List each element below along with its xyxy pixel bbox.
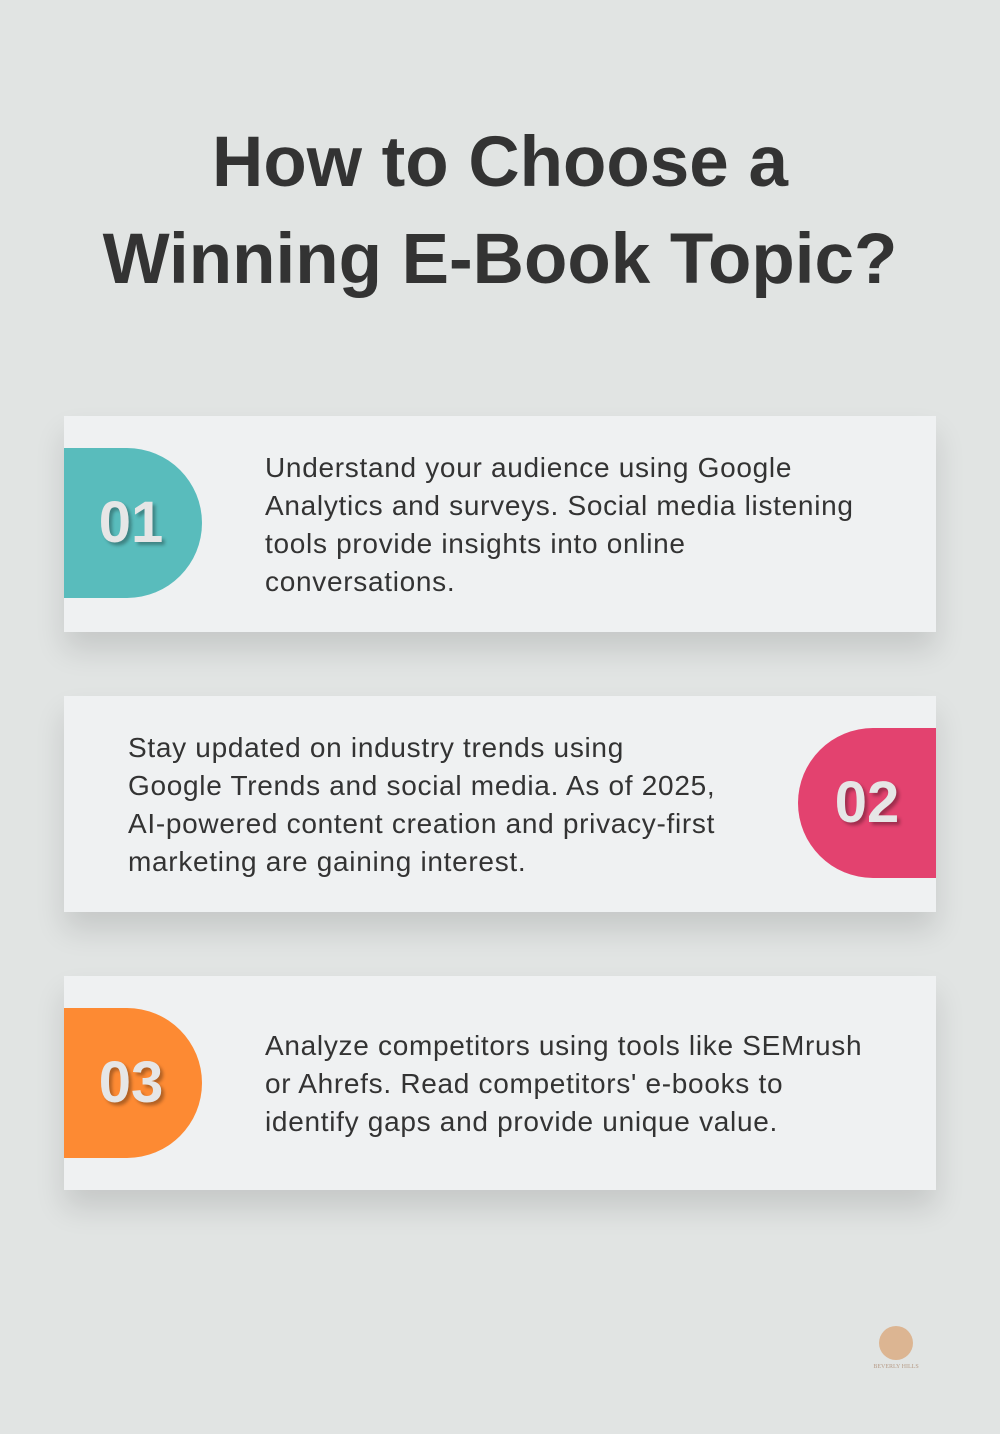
text 2: Stay updated on industry trends using (128, 732, 624, 763)
title: How to Choose a (212, 123, 788, 202)
text 1: tools provide insights into online (265, 528, 686, 559)
text 1: Understand your audience using Google (265, 452, 792, 483)
badge 03: 03 (99, 1050, 163, 1115)
text 3: or Ahrefs. Read competitors' e-books to (265, 1068, 783, 1099)
title (102, 123, 897, 299)
badge 01 (64, 448, 202, 598)
text 2: marketing are gaining interest. (128, 846, 526, 877)
badge 01: 01 (99, 490, 163, 555)
text 2: Google Trends and social media. As of 2025, (128, 770, 715, 801)
logo (873, 1326, 919, 1370)
title: Winning E-Book Topic? (103, 220, 897, 299)
logo: BEVERLY HILLS (873, 1364, 919, 1370)
panel: step 2 (64, 696, 936, 912)
text 2 (128, 732, 715, 877)
text 3 (265, 1030, 862, 1137)
text 1 (265, 452, 854, 597)
text 3: Analyze competitors using tools like SEMrush (265, 1030, 862, 1061)
text 1: Analytics and surveys. Social media listening (265, 490, 854, 521)
panel: step 1 (64, 416, 936, 632)
text 2: AI-powered content creation and privacy-first (128, 808, 715, 839)
text 3: identify gaps and provide unique value. (265, 1106, 778, 1137)
text 1: conversations. (265, 566, 455, 597)
badge 03 (64, 1008, 202, 1158)
panel: step 3 (64, 976, 936, 1190)
badge 02: 02 (835, 770, 899, 835)
badge 02 (798, 728, 936, 878)
